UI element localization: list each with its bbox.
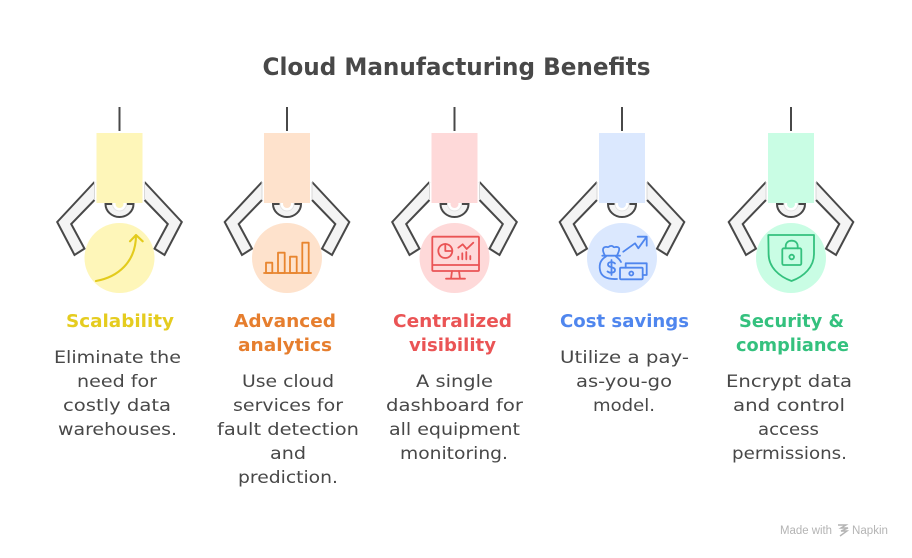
text: centralized visibility description: dashboard for — [386, 396, 523, 416]
heading: security and compliance: compliance — [736, 336, 849, 356]
panel: advanced analytics — [217, 107, 359, 488]
text: scalability description — [54, 348, 181, 440]
watermark: made with napkin — [780, 525, 888, 537]
panel: security and compliance — [726, 107, 853, 464]
panel: scalability — [54, 107, 182, 440]
heading: centralized visibility: visibility — [409, 336, 497, 356]
text: centralized visibility description: monitoring. — [400, 444, 508, 464]
text: advanced analytics description: and — [270, 444, 306, 464]
text: scalability description: costly data — [63, 396, 171, 416]
gripper: cost savings — [560, 107, 684, 255]
gripper: scalability — [57, 107, 182, 255]
text: scalability description: need for — [77, 372, 157, 392]
heading: cost savings: Cost savings — [560, 312, 689, 332]
text: security and compliance description — [726, 372, 852, 464]
heading: centralized visibility: Centralized — [393, 312, 512, 332]
icon: monitor dashboard — [420, 223, 490, 293]
text: security and compliance description: and control — [733, 396, 845, 416]
text: centralized visibility description: all equipment — [389, 420, 520, 440]
heading: security and compliance: Security & — [739, 312, 844, 332]
heading: scalability: Scalability — [66, 312, 175, 332]
text: advanced analytics description — [217, 372, 359, 488]
text: advanced analytics description: services for — [233, 396, 343, 416]
panel: centralized visibility — [386, 107, 523, 464]
panel: cost savings — [560, 107, 689, 416]
heading: advanced analytics: Advanced — [234, 312, 336, 332]
text: cost savings description: as-you-go — [576, 372, 672, 392]
icon: money bag and cash — [587, 223, 657, 293]
gripper: security and compliance — [729, 107, 853, 255]
text: cost savings description: model. — [593, 396, 655, 416]
heading: centralized visibility — [393, 312, 512, 356]
heading: advanced analytics: analytics — [238, 336, 332, 356]
heading: advanced analytics — [234, 312, 336, 356]
heading: security and compliance — [736, 312, 849, 356]
text: advanced analytics description: fault detection — [217, 420, 359, 440]
text: centralized visibility description: A single — [416, 372, 493, 392]
text: cost savings description — [560, 348, 689, 416]
gripper: advanced analytics — [225, 107, 349, 255]
watermark: made with napkin: Made with — [780, 525, 832, 537]
icon: growth arrow — [84, 223, 154, 293]
text: security and compliance description: access — [758, 420, 819, 440]
icon: shield with lock — [756, 223, 826, 293]
title: Cloud Manufacturing Benefits — [262, 53, 650, 81]
text: advanced analytics description: prediction. — [238, 468, 338, 488]
text: security and compliance description: Encrypt data — [726, 372, 852, 392]
text: cost savings description: Utilize a pay- — [560, 348, 689, 368]
watermark: made with napkin: Napkin — [852, 525, 888, 537]
text: scalability description: Eliminate the — [54, 348, 181, 368]
text: security and compliance description: permissions. — [732, 444, 847, 464]
gripper: centralized visibility — [392, 107, 517, 255]
icon: bar chart — [252, 223, 322, 293]
text: advanced analytics description: Use cloud — [242, 372, 334, 392]
icon: napkin logo — [838, 525, 848, 536]
text: scalability description: warehouses. — [58, 420, 177, 440]
text: centralized visibility description — [386, 372, 523, 464]
